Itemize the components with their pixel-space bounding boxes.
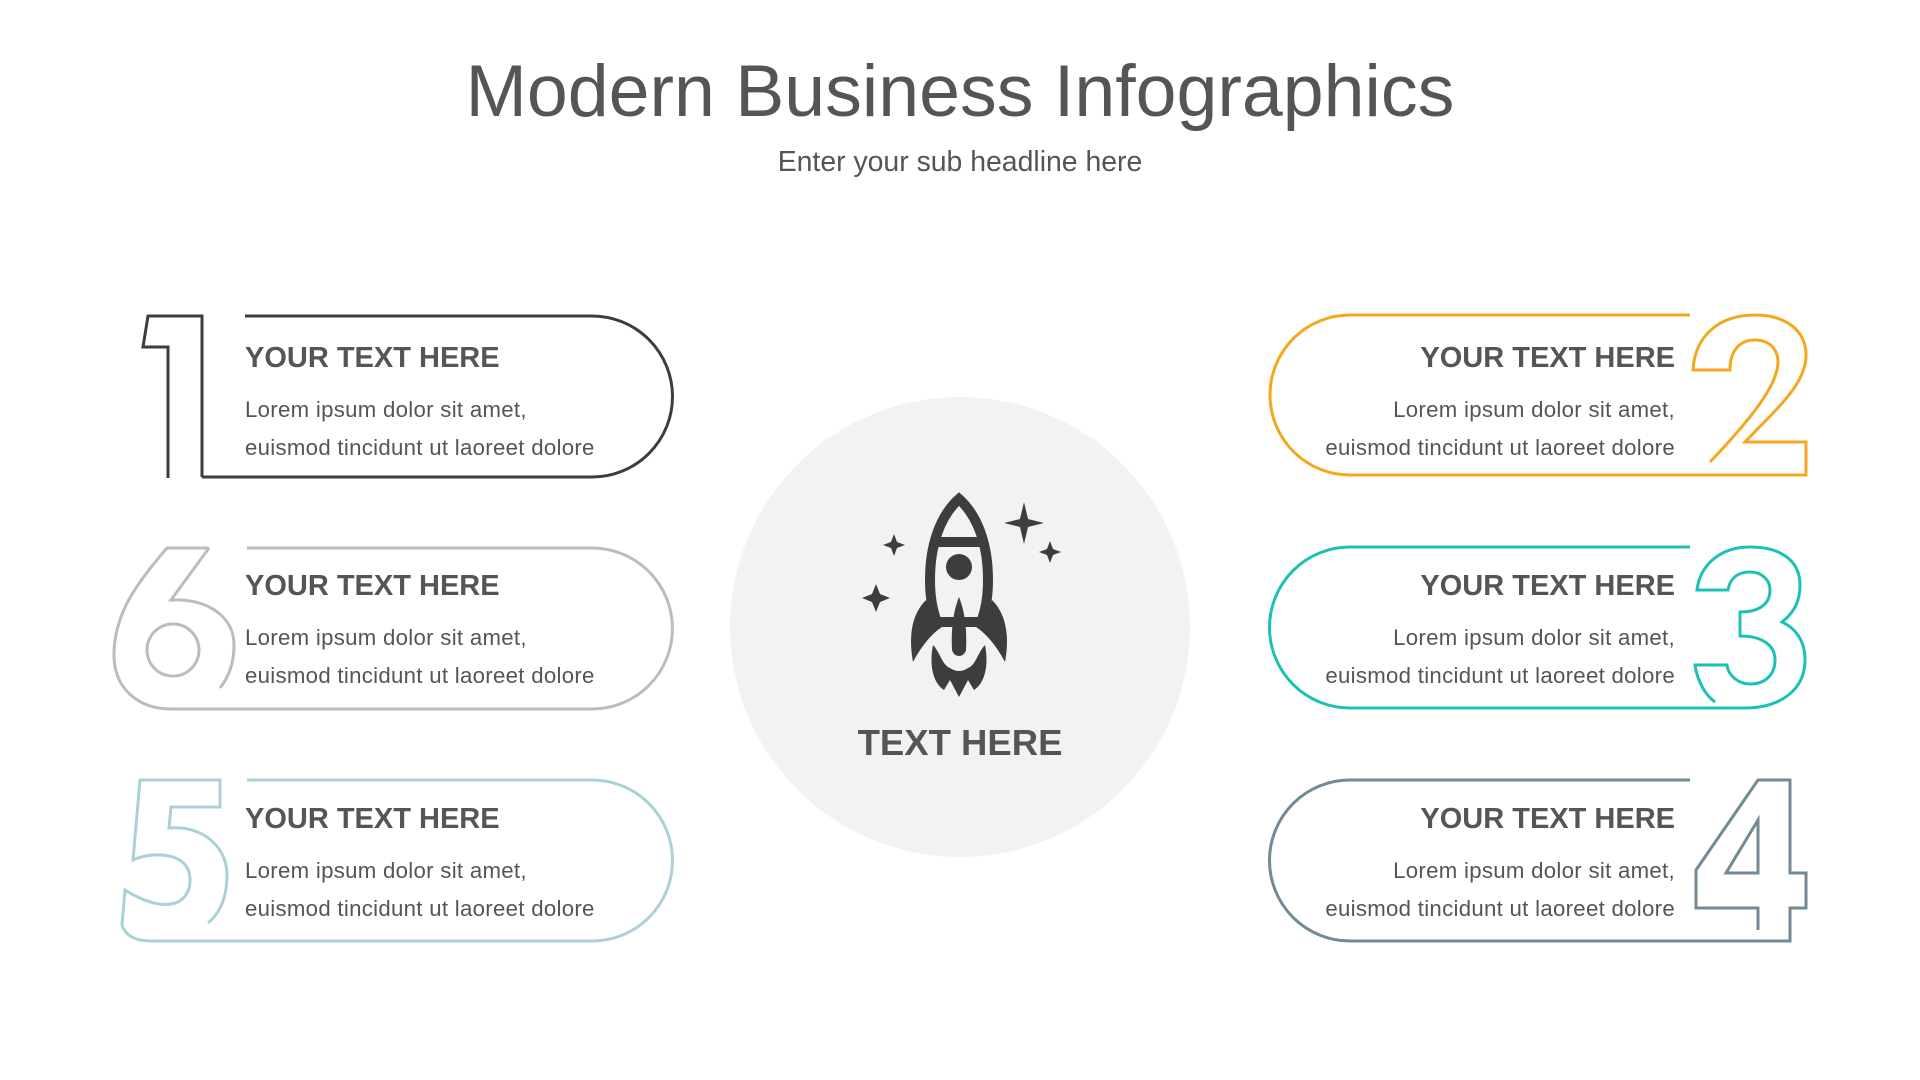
panel 2 text: Lorem ipsum dolor sit amet, bbox=[1393, 397, 1675, 422]
panel 3 text: Lorem ipsum dolor sit amet, bbox=[1393, 625, 1675, 650]
panel 3 text: euismod tincidunt ut laoreet dolore bbox=[1325, 663, 1675, 688]
center circle bbox=[730, 397, 1190, 857]
panel 1 text: YOUR TEXT HERE bbox=[245, 342, 500, 374]
panel 2 text: euismod tincidunt ut laoreet dolore bbox=[1325, 435, 1675, 460]
panel 6 text: YOUR TEXT HERE bbox=[245, 570, 500, 602]
panel 6 shape bbox=[114, 548, 672, 709]
panel 1 text: euismod tincidunt ut laoreet dolore bbox=[245, 435, 595, 460]
panel 5 text bbox=[245, 803, 595, 921]
panel 4 text: Lorem ipsum dolor sit amet, bbox=[1393, 858, 1675, 883]
icon: rocket bbox=[862, 499, 1061, 697]
panel 2 text: YOUR TEXT HERE bbox=[1420, 342, 1675, 374]
panel 5 shape bbox=[122, 780, 672, 941]
panel 6 text bbox=[245, 570, 595, 688]
panel 2 shape bbox=[1270, 315, 1806, 475]
subtitle: Enter your sub headline here bbox=[778, 146, 1142, 178]
panel 5 text: Lorem ipsum dolor sit amet, bbox=[245, 858, 527, 883]
panel 4 text: euismod tincidunt ut laoreet dolore bbox=[1325, 896, 1675, 921]
panel 6 text: Lorem ipsum dolor sit amet, bbox=[245, 625, 527, 650]
panel 4 text bbox=[1325, 803, 1675, 921]
panel 1 text bbox=[245, 342, 595, 460]
panel 3 text bbox=[1325, 570, 1675, 688]
panel 1 shape bbox=[143, 316, 672, 478]
center label: TEXT HERE bbox=[858, 722, 1062, 763]
panel 1 text: Lorem ipsum dolor sit amet, bbox=[245, 397, 527, 422]
panel 5 text: euismod tincidunt ut laoreet dolore bbox=[245, 896, 595, 921]
panel 5 text: YOUR TEXT HERE bbox=[245, 803, 500, 835]
panel 4 shape bbox=[1270, 780, 1806, 941]
panel 4 text: YOUR TEXT HERE bbox=[1420, 803, 1675, 835]
panel 3 text: YOUR TEXT HERE bbox=[1420, 570, 1675, 602]
panel 3 shape bbox=[1270, 547, 1805, 708]
panel 6 text: euismod tincidunt ut laoreet dolore bbox=[245, 663, 595, 688]
panel 2 text bbox=[1325, 342, 1675, 460]
title: Modern Business Infographics bbox=[466, 49, 1454, 132]
